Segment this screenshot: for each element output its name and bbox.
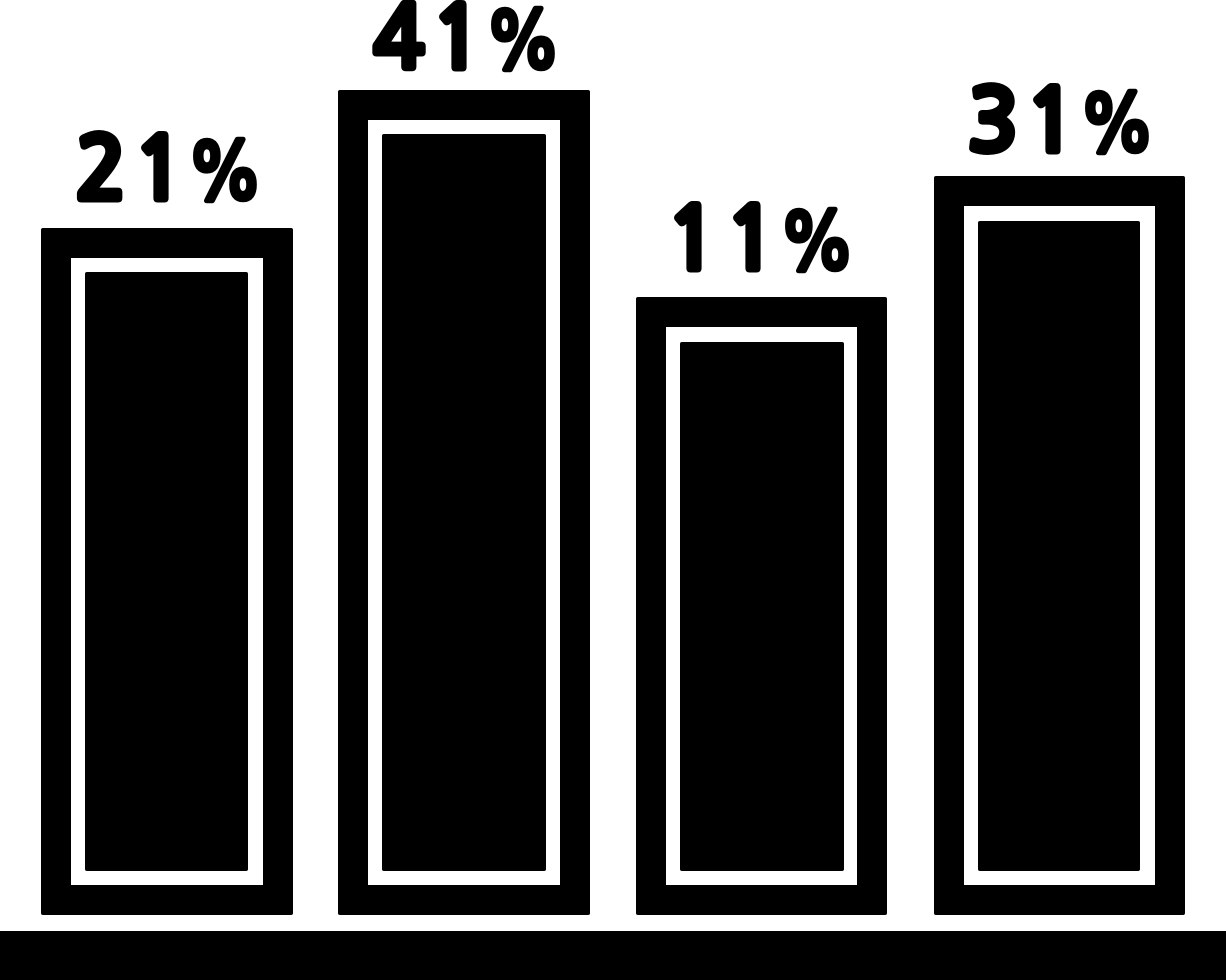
label: 41% bbox=[373, 0, 561, 82]
label: 31%: 1 bbox=[1025, 79, 1077, 164]
label: 21%: 2 bbox=[75, 127, 127, 212]
label: 31% bbox=[967, 79, 1155, 165]
label: 11%: 1 bbox=[666, 197, 718, 282]
label: 41%: % bbox=[485, 5, 561, 82]
bar: 41% bbox=[338, 90, 590, 915]
label: 11%: 1 bbox=[725, 197, 777, 282]
label: 11%: % bbox=[779, 206, 855, 283]
label: 31%: % bbox=[1079, 88, 1155, 165]
label: 21%: % bbox=[187, 136, 263, 213]
bar: 11% bbox=[636, 297, 887, 915]
baseline bbox=[0, 931, 1226, 980]
label: 31%: 3 bbox=[967, 79, 1019, 164]
bar: 21% bbox=[41, 228, 293, 915]
label: 11% bbox=[666, 197, 855, 283]
bar: 31% bbox=[934, 176, 1185, 915]
label: 21%: 1 bbox=[133, 127, 185, 212]
label: 21% bbox=[75, 127, 263, 213]
